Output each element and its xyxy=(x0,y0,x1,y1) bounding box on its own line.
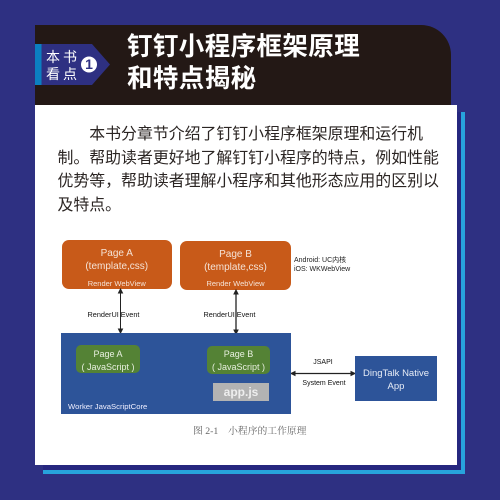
box: Page A template xyxy=(62,240,172,289)
worker panel xyxy=(61,333,291,414)
box: Page B template: Render WebView xyxy=(206,279,265,288)
box: DingTalk Native App: App xyxy=(388,380,404,392)
box: Page B JavaScript xyxy=(207,346,270,374)
body paragraph: 制。帮助读者更好地了解钉钉小程序的特点，例如性能 xyxy=(58,150,439,167)
badge: 本书看点 1: 1 xyxy=(85,56,93,72)
box: DingTalk Native App: DingTalk Native xyxy=(363,368,429,378)
box: DingTalk Native App xyxy=(355,356,437,401)
box: app.js xyxy=(213,383,269,401)
badge: 本书看点 1: 看点 xyxy=(46,66,80,82)
title xyxy=(127,32,360,93)
blue offset frame xyxy=(43,112,465,474)
caption: 图 2-1 小程序的工作原理 xyxy=(193,426,306,436)
box: Page B JavaScript: Page B xyxy=(224,349,253,359)
label: RenderUI Event A: RenderUI Event xyxy=(88,310,139,319)
note: Android and iOS kernels: Android: UC内核 xyxy=(294,256,346,264)
arrows: RenderUI Event and JSAPI xyxy=(118,288,355,376)
header band xyxy=(35,25,451,105)
title: 和特点揭秘 xyxy=(127,65,257,93)
label: RenderUI Event B: RenderUI Event xyxy=(204,310,255,319)
badge: 本书看点 1: 本书 xyxy=(46,48,80,64)
box: Page A JavaScript xyxy=(76,345,140,373)
badge: 本书看点 1 xyxy=(35,44,110,85)
box: Page A JavaScript: ( JavaScript ) xyxy=(81,362,134,372)
label: System Event: System Event xyxy=(302,380,346,387)
box: Page A JavaScript: Page A xyxy=(93,349,123,359)
box: Page B JavaScript: ( JavaScript ) xyxy=(212,362,265,372)
diagram xyxy=(61,240,437,436)
note: Android and iOS kernels: iOS: WKWebView xyxy=(294,266,350,272)
label: JSAPI: JSAPI xyxy=(313,359,333,366)
box: Page B template: Page B xyxy=(219,249,252,260)
box: Page A template: Render WebView xyxy=(88,279,146,288)
body paragraph: 本书分章节介绍了钉钉小程序框架原理和运行机 xyxy=(89,126,423,143)
box: Page A template: (template,css) xyxy=(85,261,148,272)
box: Page B template xyxy=(180,241,291,290)
title: 钉钉小程序框架原理 xyxy=(127,33,360,61)
white content panel xyxy=(35,105,457,465)
box: Page B template: (template,css) xyxy=(204,262,267,273)
body paragraph: 优势等，帮助读者理解小程序和其他形态应用的区别以 xyxy=(58,173,439,190)
body paragraph xyxy=(58,125,439,214)
label: Worker JavaScriptCore: Worker JavaScriptCore xyxy=(68,402,147,411)
note: Android and iOS kernels xyxy=(294,256,350,272)
body paragraph: 及特点。 xyxy=(58,197,121,214)
box: app.js: app.js xyxy=(224,385,258,399)
box: Page A template: Page A xyxy=(101,248,133,259)
